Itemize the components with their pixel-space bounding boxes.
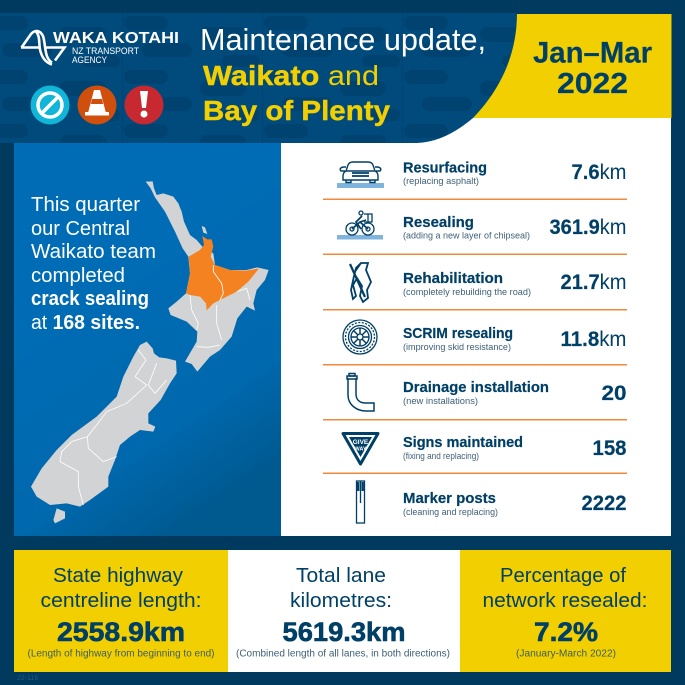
Great Barrier Island	[202, 226, 207, 234]
icon: give way sign: WAY	[354, 446, 367, 452]
value: 7.6km	[572, 161, 626, 184]
icon: wheel	[343, 320, 377, 354]
header band	[0, 13, 517, 143]
region boundaries	[190, 265, 250, 347]
row: drainage installation	[347, 374, 626, 411]
map: New Zealand	[31, 181, 269, 523]
icon: worker with shovel	[350, 263, 371, 302]
logo agency name: NZ TRANSPORT	[72, 46, 139, 56]
title line 2: Waikato and	[203, 60, 379, 91]
title	[200, 22, 486, 126]
icon: marker post	[356, 481, 364, 523]
row: marker posts	[356, 481, 626, 523]
row: signs maintained	[343, 434, 627, 464]
icon: no entry	[30, 86, 70, 124]
row: resealing	[337, 211, 626, 240]
icon: traffic cone	[78, 86, 116, 124]
callout: crack sealing	[31, 288, 149, 310]
description: (replacing asphalt)	[403, 176, 479, 186]
description: (fixing and replacing)	[403, 451, 479, 461]
value: 5619.3km	[282, 617, 406, 647]
callout	[31, 194, 156, 334]
date line 2: 2022	[557, 68, 628, 100]
description: (cleaning and replacing)	[403, 507, 498, 517]
description: (new installations)	[403, 396, 478, 406]
value: 20	[602, 382, 626, 405]
value: 2558.9km	[57, 617, 185, 647]
South Island	[31, 342, 177, 507]
logo wordmark: WAKA KOTAHI	[53, 30, 179, 47]
panel: total lane kilometres	[228, 550, 460, 672]
logo agency name second line: AGENCY	[72, 55, 107, 65]
description: (improving skid resistance)	[403, 342, 511, 352]
North Island	[146, 181, 269, 372]
icon: cyclist	[337, 211, 383, 240]
date line 1: Jan–Mar	[533, 36, 652, 70]
heading line 2: network resealed:	[482, 590, 648, 612]
icon: car	[337, 162, 384, 188]
callout: Waikato team	[31, 241, 156, 263]
heading line 2: kilometres:	[290, 590, 392, 612]
panel: activities	[281, 118, 671, 536]
reference code: 22-116	[17, 675, 38, 682]
row dividers	[323, 198, 627, 474]
note: (Combined length of all lanes, in both directions)	[236, 648, 450, 660]
label: Marker posts	[403, 490, 496, 507]
logo	[21, 30, 179, 65]
label: Rehabilitation	[403, 270, 503, 287]
callout: at 168 sites.	[31, 312, 140, 334]
panel: state highway length	[14, 550, 228, 672]
description: (adding a new layer of chipseal)	[403, 230, 530, 240]
date box	[450, 14, 672, 118]
heading: Percentage of	[500, 565, 626, 587]
icon: give way sign	[343, 434, 378, 464]
row: resurfacing	[337, 160, 626, 188]
label: Drainage installation	[403, 379, 549, 396]
heading: State highway	[53, 565, 183, 587]
callout: This quarter	[31, 194, 140, 216]
title line 1: Maintenance update,	[200, 22, 486, 57]
row: SCRIM resealing	[343, 320, 626, 354]
value: 361.9km	[550, 216, 626, 239]
panel: map	[14, 143, 281, 536]
South Island boundaries	[60, 350, 167, 505]
label: Resurfacing	[403, 160, 487, 176]
value: 11.8km	[560, 328, 626, 351]
highlighted region: Waikato and Bay of Plenty	[186, 236, 259, 310]
note: (Length of highway from beginning to end)	[28, 648, 214, 660]
label: SCRIM resealing	[403, 325, 513, 342]
title line 3: Bay of Plenty	[203, 95, 390, 126]
icon: exclamation	[124, 86, 164, 124]
icon: give way sign: GIVE	[353, 439, 369, 446]
row: rehabilitation	[350, 263, 626, 302]
Stewart Island	[53, 508, 65, 523]
value: 158	[592, 437, 627, 460]
value: 7.2%	[534, 617, 598, 647]
heading: Total lane	[296, 565, 386, 587]
label: Resealing	[403, 214, 474, 231]
note: (January-March 2022)	[516, 648, 616, 660]
description: (completely rebuilding the road)	[403, 287, 531, 297]
value: 21.7km	[560, 271, 626, 294]
panel: percentage resealed	[460, 550, 671, 672]
callout: our Central	[31, 218, 130, 240]
callout: completed	[31, 265, 125, 287]
value: 2222	[582, 492, 626, 515]
icon: pipe	[347, 374, 374, 411]
label: Signs maintained	[403, 434, 523, 451]
logo mark	[21, 31, 64, 64]
heading line 2: centreline length:	[40, 590, 202, 612]
